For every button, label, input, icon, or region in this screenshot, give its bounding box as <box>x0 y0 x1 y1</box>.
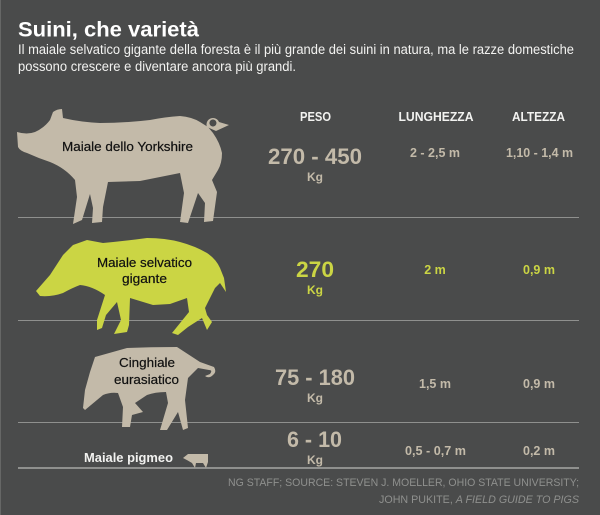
label: Cinghiale eurasiatico: Cinghiale <box>119 356 175 370</box>
title: Suini, che varietà <box>18 18 199 42</box>
weight: Kg <box>307 283 323 297</box>
label: Maiale selvatico gigante <box>97 256 192 286</box>
height: 0,9 m <box>523 263 555 277</box>
label: Maiale selvatico gigante: Maiale selvatico <box>97 256 192 270</box>
weight <box>275 365 355 405</box>
weight: Kg <box>307 453 323 467</box>
label: Maiale pigmeo: Maiale pigmeo <box>84 451 173 465</box>
weight: 6 - 10 <box>287 427 342 452</box>
icon: Yorkshire pig silhouette <box>17 109 229 224</box>
weight: Kg <box>307 391 323 405</box>
weight: 270 - 450 <box>268 144 362 169</box>
row: Cinghiale eurasiatico <box>83 347 555 430</box>
height: 1,10 - 1,4 m <box>506 146 573 160</box>
length: 2 m <box>424 263 446 277</box>
height: 0,2 m <box>523 444 555 458</box>
row: Maiale dello Yorkshire <box>17 109 573 224</box>
row: Maiale selvatico gigante <box>36 238 555 335</box>
weight: 270 <box>296 257 334 282</box>
icon: Eurasian boar silhouette <box>83 347 215 430</box>
length: 0,5 - 0,7 m <box>405 444 466 458</box>
column headers <box>300 110 565 124</box>
intro text: possono crescere e diventare ancora più grandi. <box>18 59 296 74</box>
label: Cinghiale eurasiatico <box>114 356 179 387</box>
column headers: PESO <box>300 110 331 124</box>
weight <box>296 257 334 297</box>
label: Maiale dello Yorkshire: Maiale dello Yorkshire <box>62 140 193 154</box>
length: 2 - 2,5 m <box>410 146 460 160</box>
intro text <box>18 42 574 74</box>
weight <box>268 144 362 184</box>
icon: pygmy hog silhouette <box>183 454 208 468</box>
icon: giant forest hog silhouette <box>36 238 226 335</box>
weight: Kg <box>307 170 323 184</box>
column headers: LUNGHEZZA <box>398 110 474 124</box>
weight <box>287 427 342 467</box>
label: Maiale selvatico gigante: gigante <box>122 272 167 286</box>
intro text: Il maiale selvatico gigante della foresta è il più grande dei suini in natura, ma le razze domestiche <box>18 42 574 57</box>
source credit: JOHN PUKITE, A FIELD GUIDE TO PIGS <box>379 494 580 506</box>
weight: 75 - 180 <box>275 365 355 390</box>
column headers: ALTEZZA <box>512 110 565 124</box>
label: Cinghiale eurasiatico: eurasiatico <box>114 373 179 387</box>
height: 0,9 m <box>523 377 555 391</box>
length: 1,5 m <box>419 377 451 391</box>
row: Maiale pigmeo <box>84 427 555 468</box>
source credit <box>228 477 580 506</box>
source credit: NG STAFF; SOURCE: STEVEN J. MOELLER, OHIO STATE UNIVERSITY; <box>228 477 579 489</box>
